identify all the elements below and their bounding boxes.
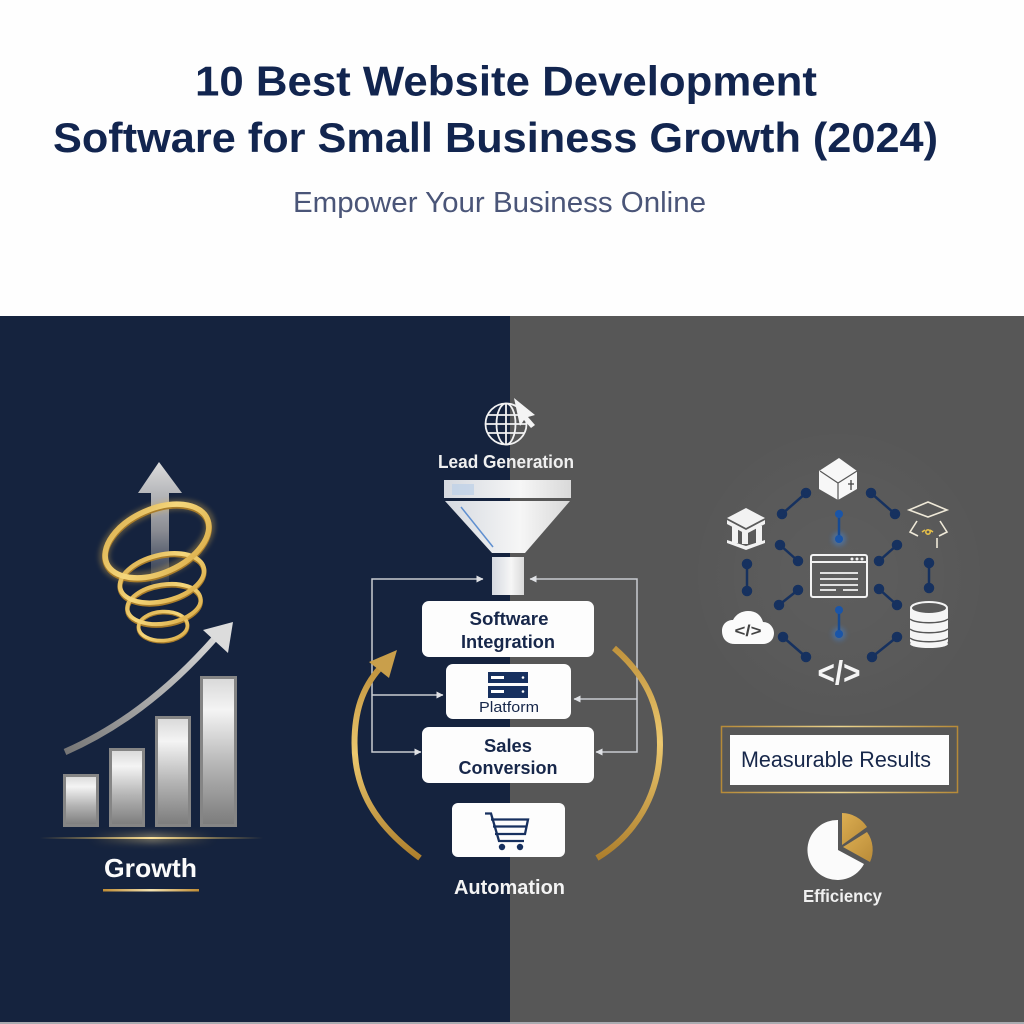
box: platform: Platform xyxy=(479,699,539,716)
label: growth: Growth xyxy=(104,853,197,883)
panel: right grey background xyxy=(510,316,1024,1024)
icon: browser window xyxy=(811,555,867,597)
funnel process diagram xyxy=(354,398,660,899)
feedback connector arrows xyxy=(372,579,637,752)
technology network diagram xyxy=(689,425,989,725)
growth illustration xyxy=(40,462,263,892)
icon: upward arrow xyxy=(138,462,182,584)
title: Software for Small Business Growth (2024) xyxy=(53,114,938,161)
panel: left navy background xyxy=(0,316,510,1024)
icon: columned temple xyxy=(727,508,765,550)
box: sales conversion: Conversion xyxy=(458,757,558,778)
subtitle: Empower Your Business Online xyxy=(293,187,706,219)
box: software integration: Software xyxy=(470,608,548,629)
label: efficiency: Efficiency xyxy=(803,886,882,906)
bar chart xyxy=(64,678,236,826)
bottom edge strip xyxy=(0,1022,1024,1024)
icon: cube xyxy=(819,458,857,500)
icon: globe with cursor xyxy=(486,398,535,444)
header background xyxy=(0,0,1024,316)
icon: outlined diamond xyxy=(909,502,947,548)
icon: code brackets: </> xyxy=(818,654,860,691)
label: automation: Automation xyxy=(454,877,565,899)
icon: gold spiral rings xyxy=(93,489,221,643)
soft halo behind network xyxy=(689,425,989,725)
gold glow baseline xyxy=(40,834,263,842)
icon: database xyxy=(910,602,948,648)
callout: measurable results: Measurable Results xyxy=(741,747,931,772)
box: sales conversion: Sales xyxy=(484,735,532,756)
pie chart: efficiency xyxy=(807,813,873,880)
callout: measurable results xyxy=(722,726,958,792)
label: lead generation: Lead Generation xyxy=(438,452,574,472)
box: software integration: Integration xyxy=(461,631,555,652)
blue vertical connectors xyxy=(832,510,846,641)
gold arc arrow: left xyxy=(354,650,420,858)
icon: server xyxy=(488,672,528,698)
icon: shopping cart xyxy=(485,814,528,850)
box: platform xyxy=(446,664,571,719)
gold arc: right xyxy=(597,648,660,858)
box: sales conversion xyxy=(422,727,594,783)
icon: funnel xyxy=(444,480,571,595)
icon: rising curved arrow xyxy=(65,622,233,752)
icon: code cloud xyxy=(722,611,774,644)
box: automation cart xyxy=(452,803,565,857)
title xyxy=(53,58,938,161)
network connectors xyxy=(743,489,933,661)
box: software integration xyxy=(422,601,594,657)
title: 10 Best Website Development xyxy=(195,58,817,104)
growth underline xyxy=(103,889,199,892)
icon: code cloud: </> xyxy=(734,623,762,640)
